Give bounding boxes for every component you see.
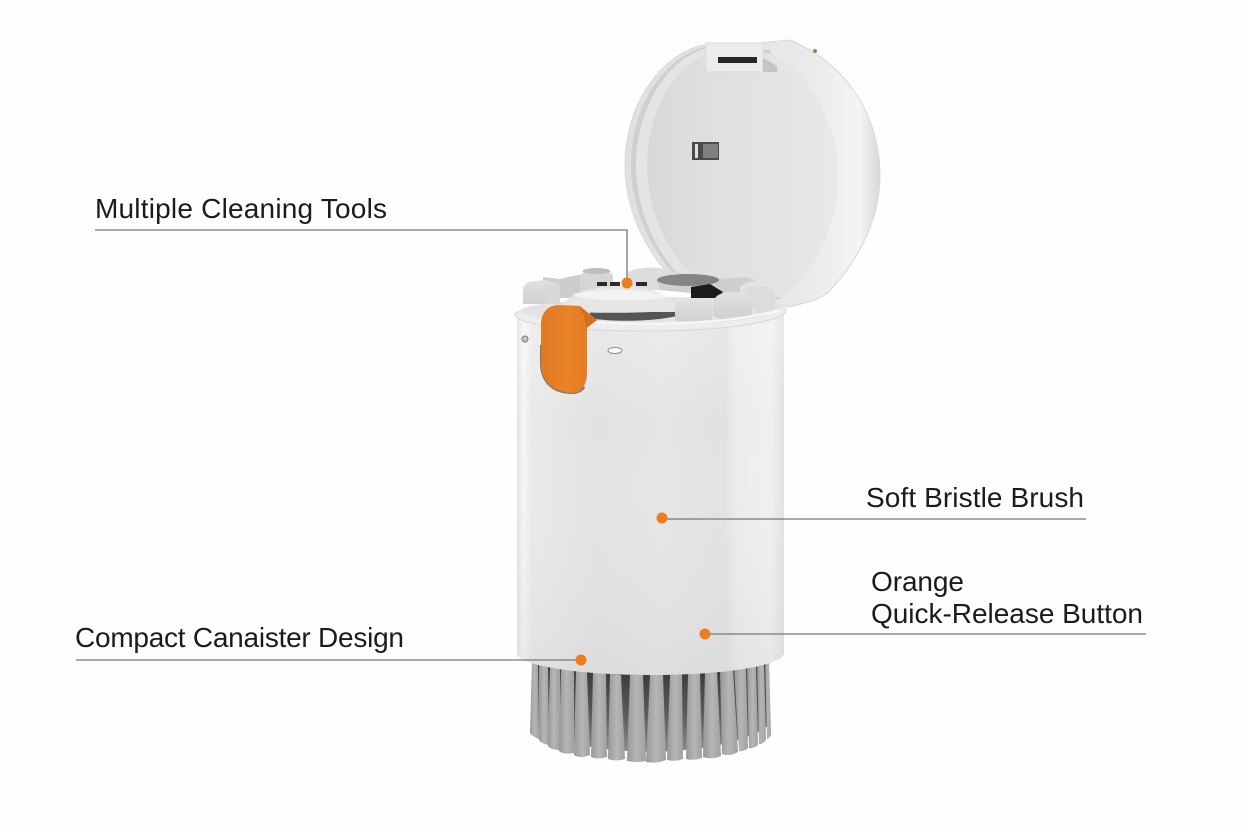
callout: compact canister design	[75, 622, 586, 666]
open lid	[625, 40, 880, 307]
callout: compact canister design: Compact Canaister Design	[75, 622, 404, 653]
back tools	[543, 275, 581, 298]
callout: multiple cleaning tools	[95, 193, 632, 288]
black tool	[691, 284, 723, 298]
hinge latch	[706, 43, 777, 72]
rim and tool compartment	[515, 268, 786, 331]
brush bristles	[530, 655, 771, 763]
callout: orange quick-release button	[700, 566, 1146, 640]
rim front edge	[590, 310, 780, 324]
side screw	[522, 336, 528, 342]
lid interior	[647, 53, 838, 297]
orange quick-release button	[540, 305, 597, 394]
grey disc tool	[657, 274, 755, 297]
callout: orange quick-release button: Orange	[871, 566, 964, 597]
callout: multiple cleaning tools: Multiple Cleaning Tools	[95, 193, 387, 224]
canister body	[517, 315, 784, 675]
central dome	[590, 312, 677, 321]
callout: soft bristle brush: Soft Bristle Brush	[866, 482, 1084, 513]
lid hinge dot	[813, 49, 817, 53]
right caps	[740, 281, 774, 296]
left cap	[523, 280, 560, 304]
slots	[597, 282, 647, 286]
status window	[608, 348, 622, 354]
lid window	[692, 142, 719, 160]
callout: orange quick-release button: Quick-Release Button	[871, 598, 1143, 629]
callout: soft bristle brush	[656, 482, 1086, 524]
